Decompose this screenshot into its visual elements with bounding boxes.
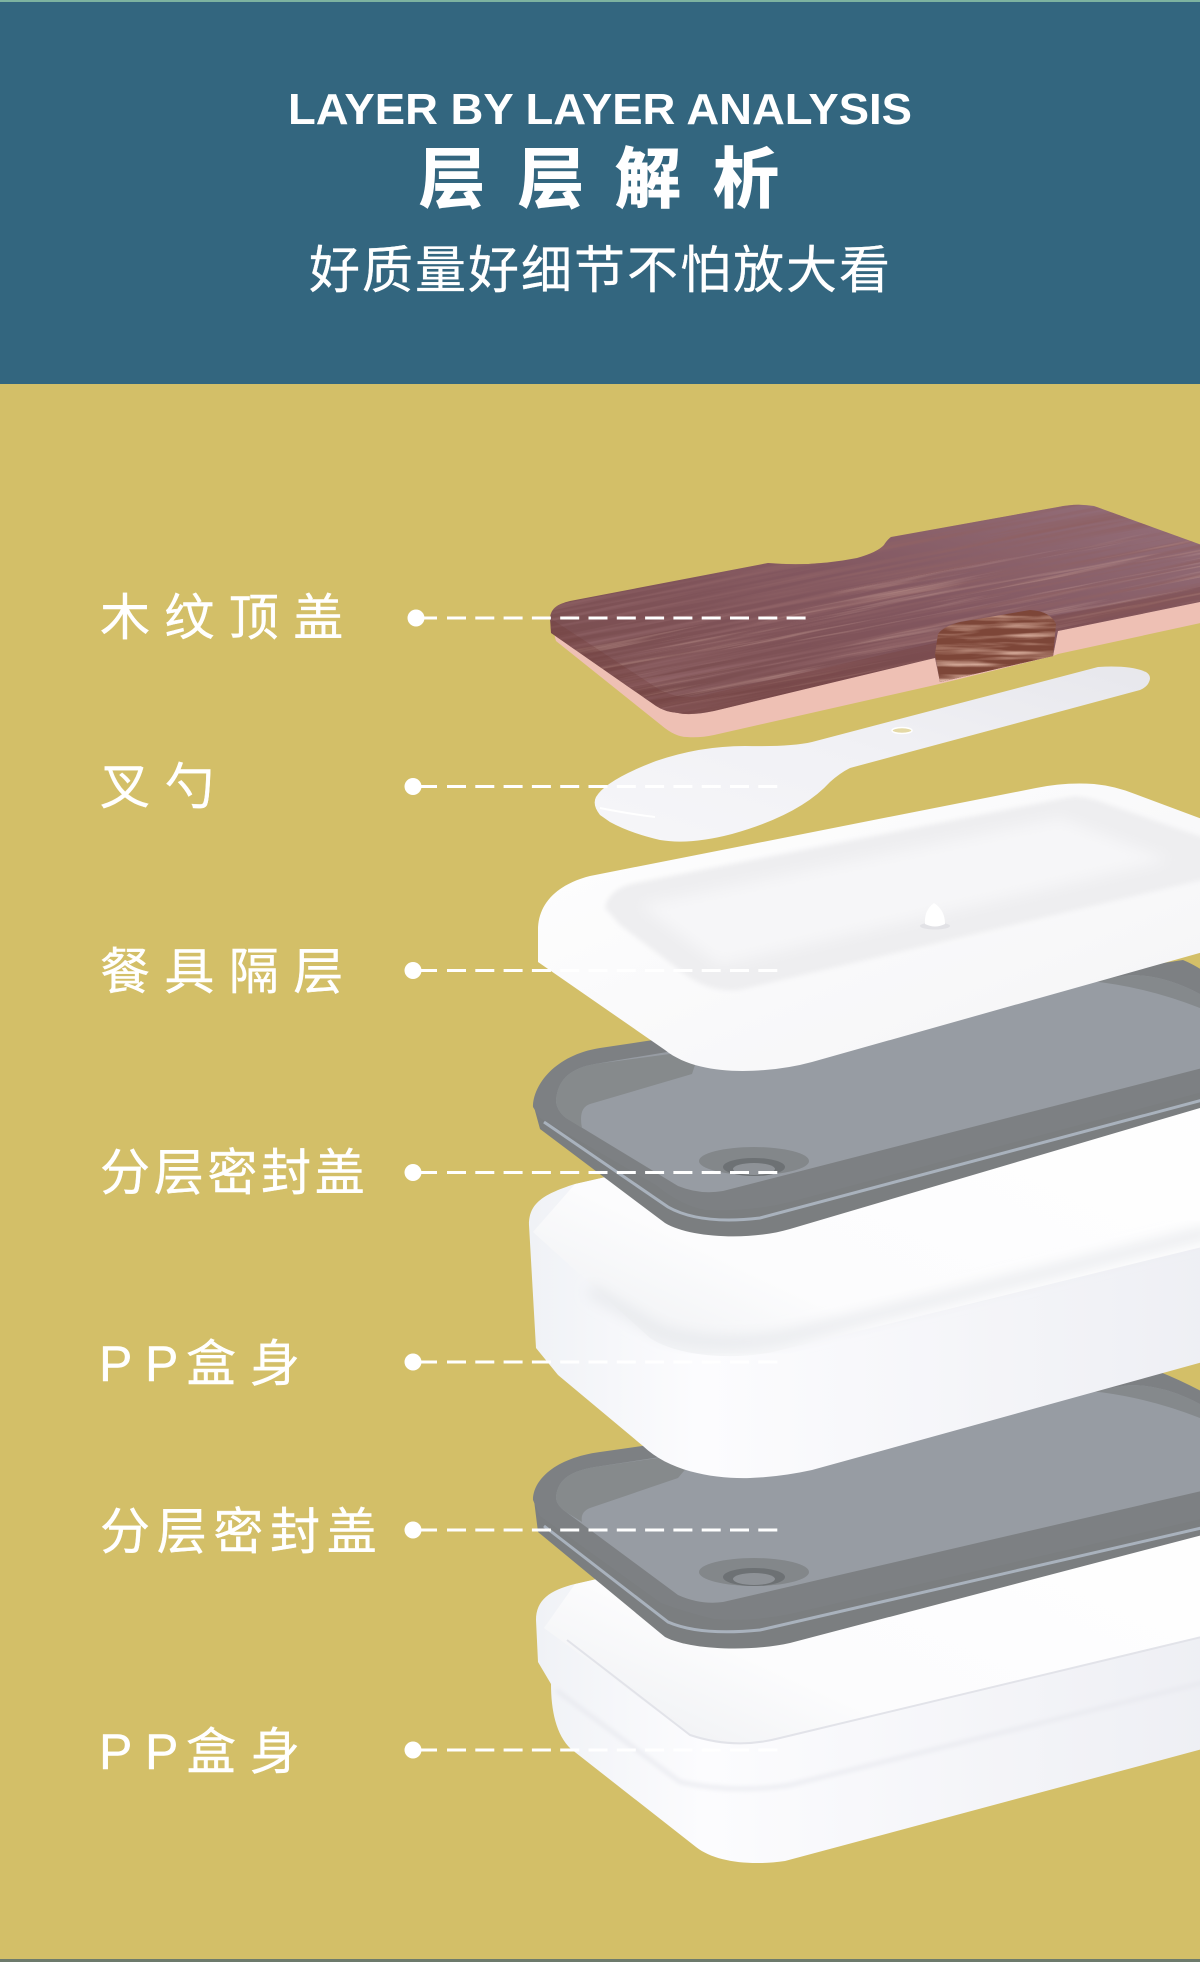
icon: lid valve top <box>699 1147 809 1176</box>
leader: tray <box>404 962 778 979</box>
product: fork spoon <box>595 667 1150 842</box>
label: lid 1: 分层密封盖 <box>100 1145 365 1201</box>
subtitle: 好质量好细节不怕放大看 <box>309 229 892 303</box>
leader: spoon <box>404 778 778 795</box>
icon: spoon hole <box>892 728 912 734</box>
leader: box 2 <box>404 1742 778 1758</box>
label: spoon: 叉勺 <box>100 759 214 815</box>
english heading: LAYER BY LAYER ANALYSIS <box>288 85 912 134</box>
label: wood lid: 木纹顶盖 <box>100 590 343 646</box>
product: upper sealing lid <box>533 960 1200 1236</box>
icon: tray peg <box>920 903 950 930</box>
label: lid 2: 分层密封盖 <box>100 1504 377 1560</box>
icon: lid valve <box>699 1558 809 1586</box>
leader: lid 2 <box>404 1522 778 1538</box>
product: lower sealing lid <box>533 1372 1200 1649</box>
label: tray: 餐具隔层 <box>100 944 343 1000</box>
product: wood grain top lid <box>550 504 1200 738</box>
label: box 2: PP盒身 <box>99 1724 300 1780</box>
product: cutlery tray <box>538 784 1200 1071</box>
lid finger tab <box>935 610 1056 682</box>
callout lines <box>404 610 806 1758</box>
label: box 1: PP盒身 <box>99 1336 300 1392</box>
chinese heading: 层层解析 <box>419 126 779 222</box>
bottom edge strip <box>0 1959 1200 1962</box>
leader: box 1 <box>404 1354 778 1370</box>
product: lower PP box body <box>536 1536 1200 1863</box>
labels <box>99 590 377 1780</box>
leader: lid 1 <box>404 1164 778 1181</box>
product: upper PP box body <box>528 1108 1200 1478</box>
header panel <box>0 0 1200 384</box>
leader: wood lid <box>408 610 806 626</box>
